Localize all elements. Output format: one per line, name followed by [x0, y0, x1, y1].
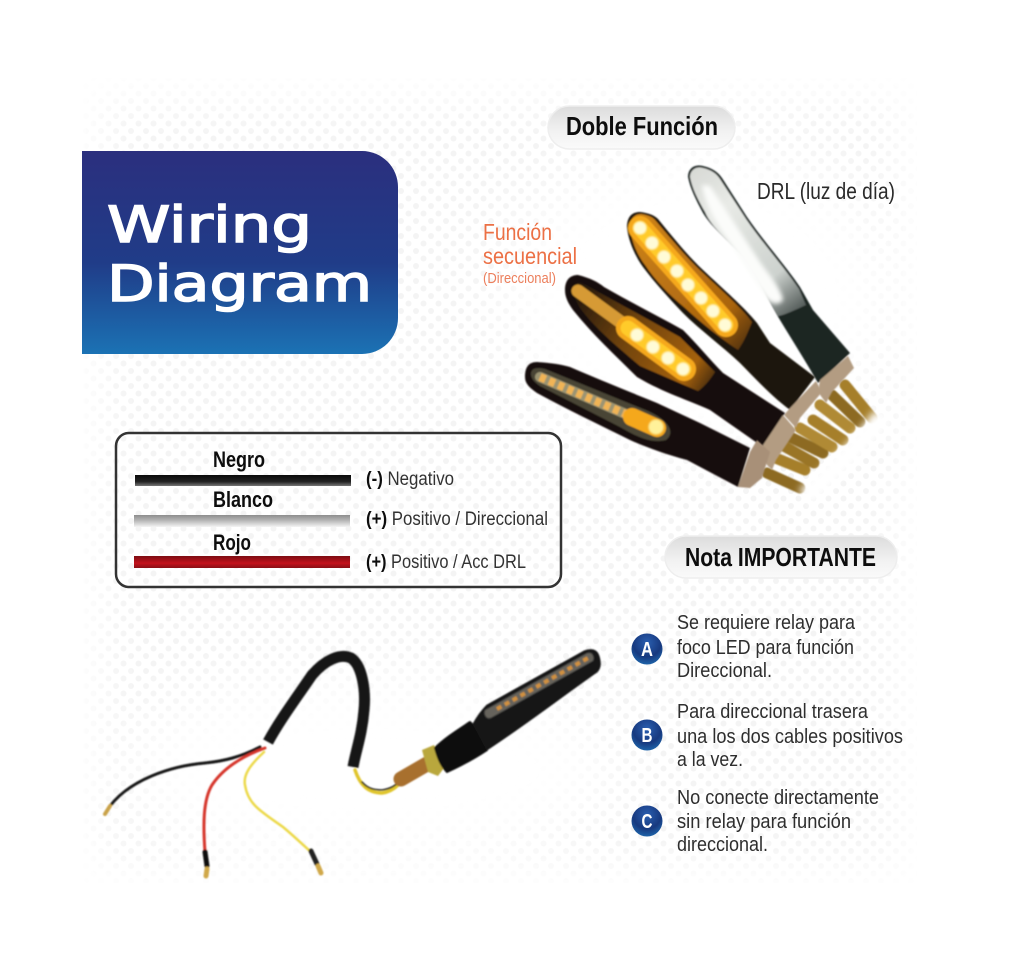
black sleeve [268, 656, 364, 767]
note C text: direccional. [677, 834, 768, 856]
brass bolt [401, 764, 427, 779]
note C text: sin relay para función [677, 811, 851, 833]
note B text: Para direccional trasera [677, 701, 869, 723]
lamp lens [484, 653, 594, 718]
label: DRL (luz de día): DRL (luz de día) [757, 178, 895, 204]
note C [632, 787, 879, 856]
nut [760, 415, 796, 470]
legend row: Rojo [134, 530, 526, 573]
label: Función secuencial (Direccional): secuencial [483, 243, 577, 269]
pill heading: Doble Función [548, 106, 735, 149]
nut [422, 745, 444, 776]
note C text: No conecte directamente [677, 787, 879, 809]
note B text: a la vez. [677, 749, 743, 771]
badge B [632, 720, 662, 750]
lamp: amber full [627, 212, 822, 428]
photo: four turn signals [525, 165, 882, 497]
note B [632, 701, 903, 771]
note A [632, 612, 856, 682]
badge A: A [641, 639, 653, 661]
pill heading: Doble Función: Doble Función [566, 111, 718, 141]
harness wires [105, 747, 398, 876]
legend row: Blanco: Blanco [213, 487, 273, 512]
nut [818, 356, 854, 403]
label: Función secuencial (Direccional): (Direccional) [483, 270, 556, 287]
wire colour legend [116, 433, 561, 587]
background dot pattern [114, 114, 884, 850]
legend row: Negro: (-) Negativo [366, 469, 454, 490]
note B text [677, 701, 903, 771]
lamp: amber tip [525, 362, 770, 488]
note A text [677, 612, 856, 682]
title panel: Wiring Diagram [82, 151, 398, 354]
lamp collar [435, 722, 487, 772]
title: Wiring [107, 196, 312, 254]
badge C [632, 806, 662, 836]
label: Función secuencial (Direccional): Función [483, 219, 552, 245]
note C text [677, 787, 879, 856]
nut [784, 381, 822, 428]
legend row: Blanco [134, 487, 548, 530]
legend row: Blanco: (+) Positivo / Direccional [366, 509, 548, 530]
wire end fade [805, 415, 882, 497]
nut [738, 440, 770, 488]
note A text: Se requiere relay para [677, 612, 856, 634]
note B text: una los dos cables positivos [677, 726, 903, 748]
photo: lamp with wiring harness [105, 650, 600, 876]
legend row: Negro: Negro [213, 447, 265, 472]
pill heading: Nota IMPORTANTE: Nota IMPORTANTE [685, 542, 876, 572]
note A text: Direccional. [677, 660, 772, 682]
lamp: DRL white [688, 165, 854, 403]
pill heading: Nota IMPORTANTE [665, 536, 897, 578]
label: Función secuencial (Direccional) [483, 219, 577, 287]
title: Diagram [107, 255, 372, 313]
note A text: foco LED para función [677, 637, 854, 659]
legend row: Rojo: Rojo [213, 530, 251, 555]
lamp head [473, 650, 600, 750]
badge A [632, 634, 662, 664]
badge B: B [642, 725, 652, 747]
lens LEDs [497, 658, 588, 709]
lamp wires [767, 385, 872, 488]
legend row: Rojo: (+) Positivo / Acc DRL [366, 552, 526, 573]
lamp: amber half [565, 275, 796, 470]
badge C: C [642, 811, 652, 833]
title [107, 196, 372, 313]
legend row: Negro [135, 447, 454, 490]
